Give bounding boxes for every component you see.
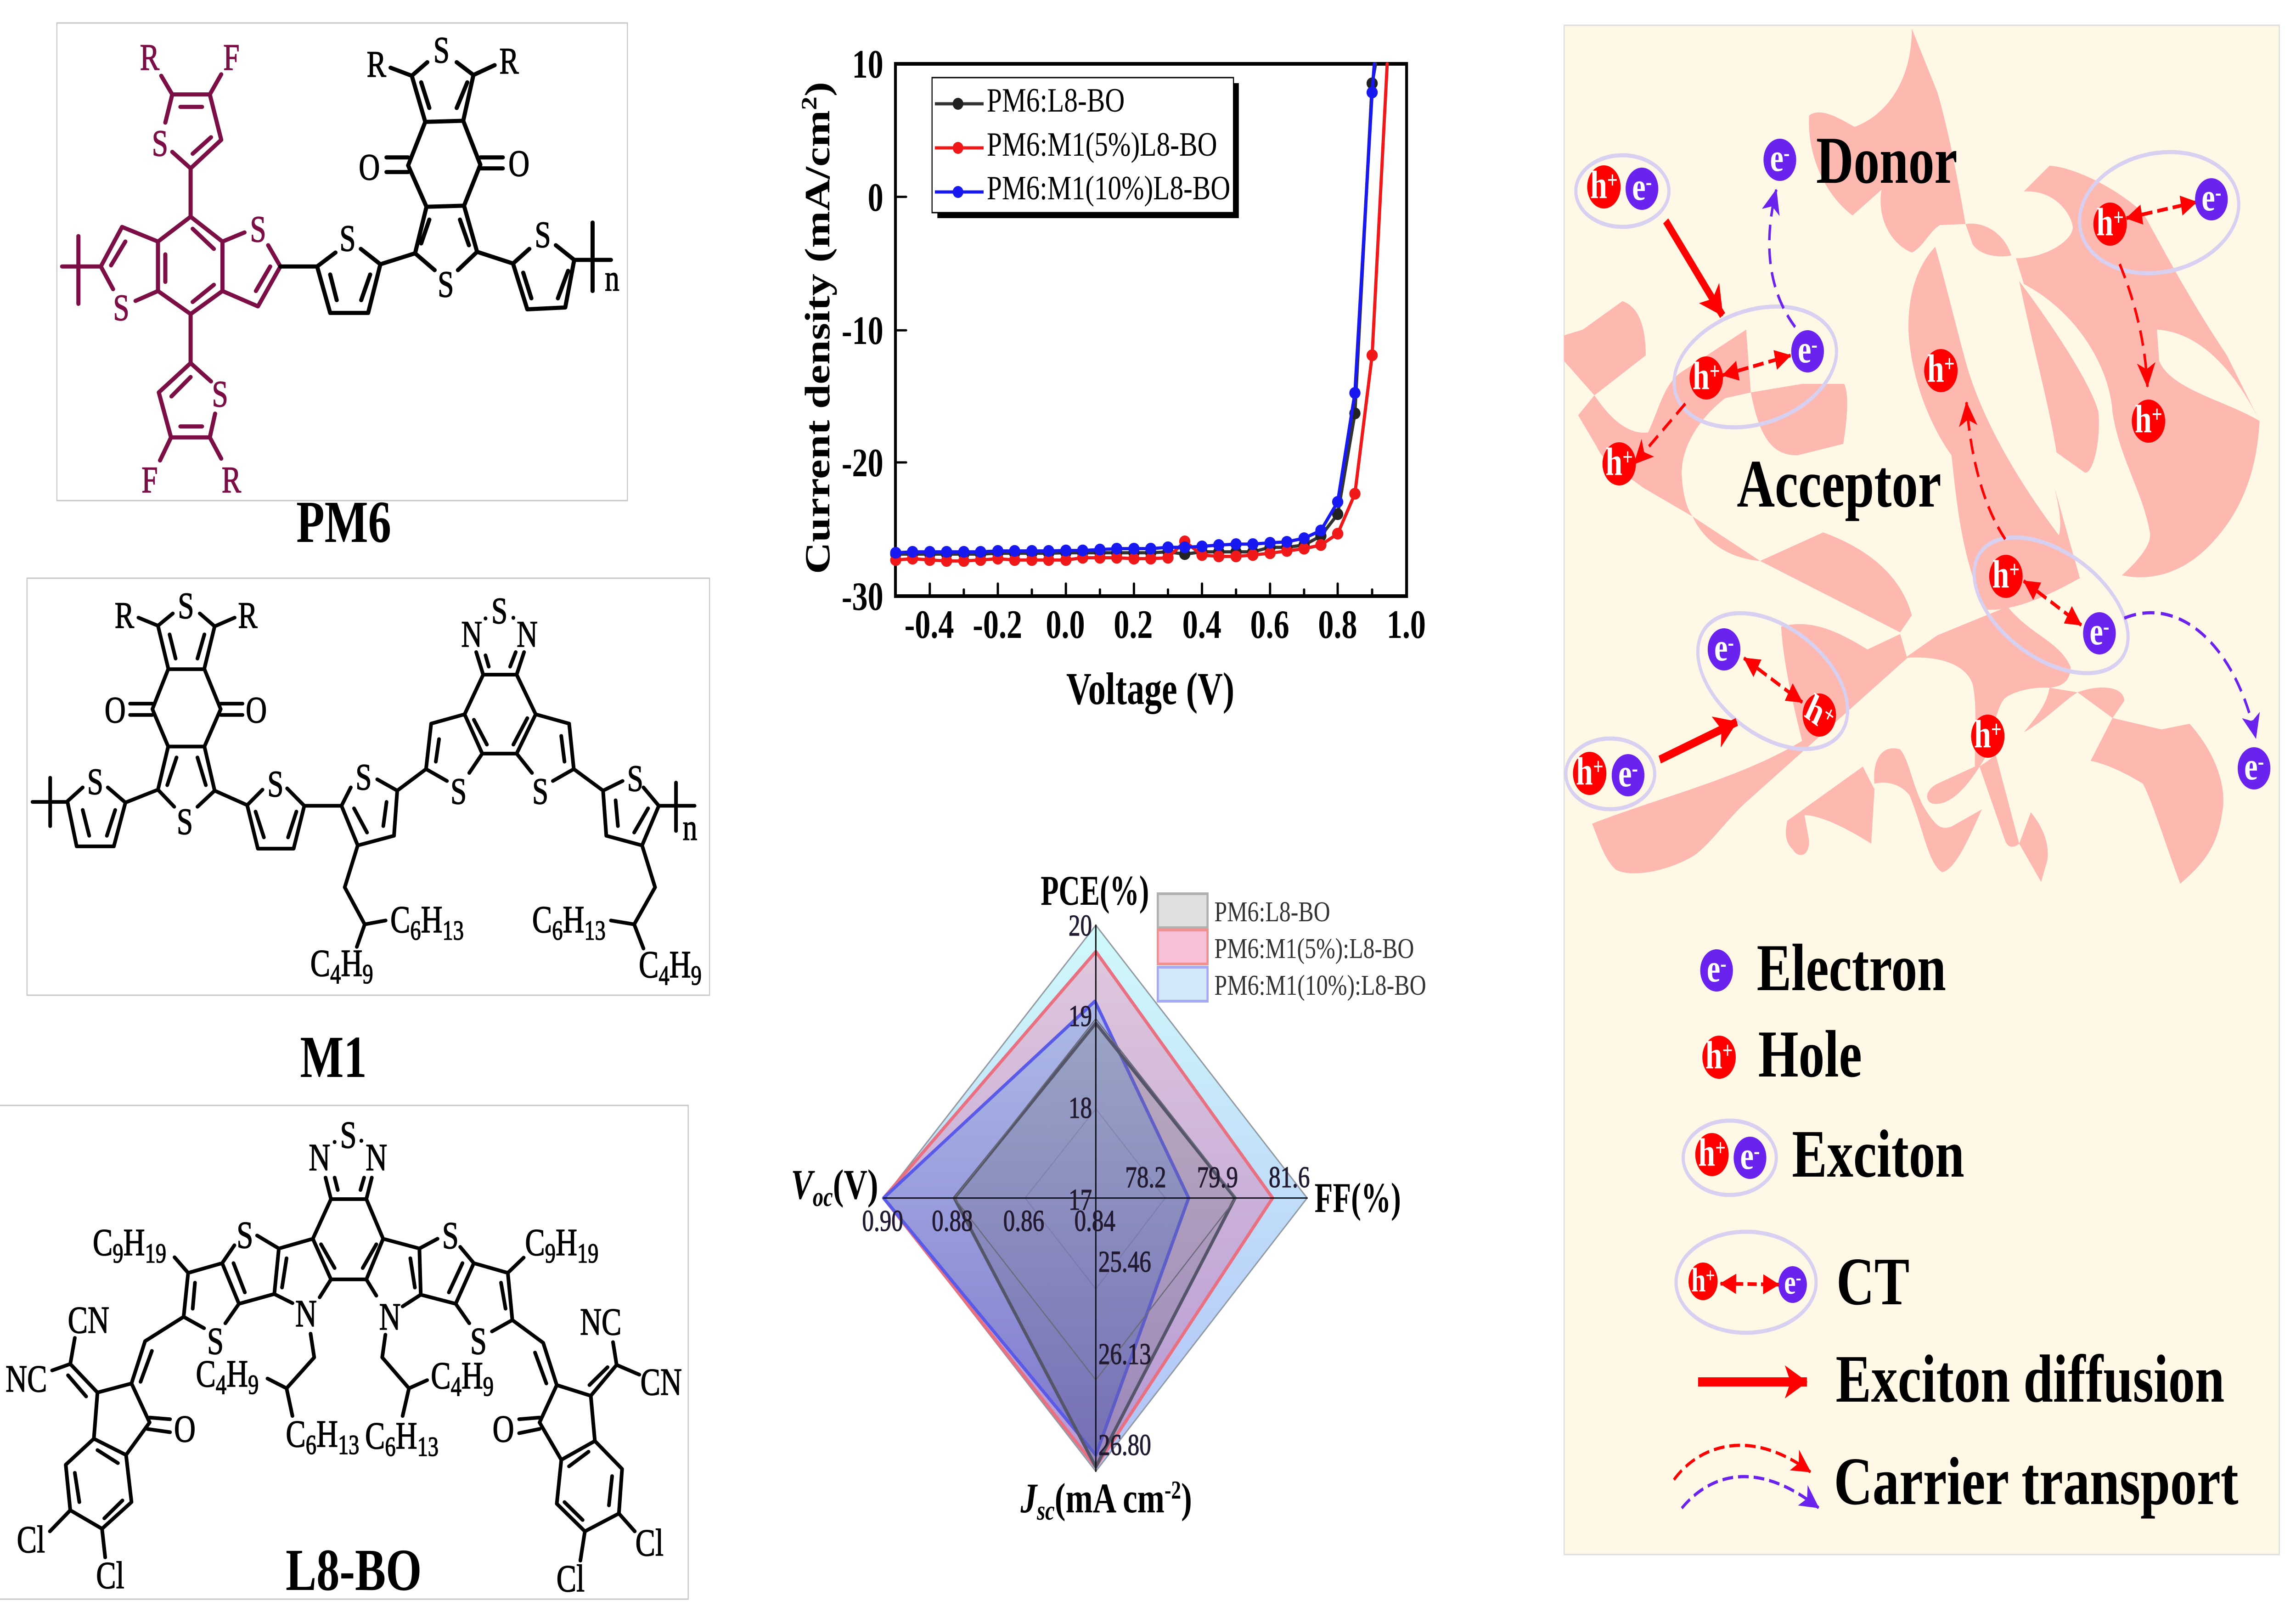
acceptor unit atom labels: S: [433, 29, 450, 71]
frame: L8-BO: [0, 1105, 688, 1599]
acceptor unit atom labels: [339, 29, 619, 305]
L8-BO side chain labels: [93, 1221, 598, 1462]
y axis tick labels: -30: [842, 575, 884, 619]
M1 side chain labels: H: [670, 943, 691, 986]
L8-BO atom labels: Cl: [96, 1554, 124, 1597]
curve: PM6:M1(10%)L8-BO: [896, 64, 1374, 553]
y axis tick labels: 0: [868, 175, 884, 220]
axis title: PCE: PCE(%): [1041, 867, 1149, 914]
radar legend: [1158, 894, 1426, 1001]
radar legend: PM6:M1(5%):L8-BO: [1214, 933, 1414, 964]
acceptor unit atom labels: S: [339, 217, 356, 259]
carriers: holes: h: [1927, 346, 1944, 390]
key: CT state: +: [1706, 1263, 1715, 1287]
L8-BO side chain labels: 9: [248, 1369, 259, 1400]
x axis tick labels: [905, 603, 1426, 647]
donor unit atom labels: S: [113, 287, 129, 328]
carriers: electrons: -: [1811, 332, 1818, 358]
donor unit atom labels: F: [223, 36, 240, 78]
L8-BO side chain labels: H: [396, 1415, 417, 1457]
carriers: electrons: -: [1728, 630, 1734, 656]
L8-BO atom labels: Cl: [557, 1557, 585, 1600]
panel: M1 structure: [27, 578, 709, 1090]
y axis title: ): [798, 82, 837, 96]
carriers: holes: h: [2096, 200, 2113, 244]
axis title: Jsc: (mA cm: [1055, 1475, 1165, 1522]
L8-BO atom labels: N: [295, 1292, 317, 1335]
L8-BO side chain labels: C: [431, 1354, 451, 1397]
arrow: exciton diffusion lower: [1660, 722, 1737, 760]
radar polygons: [884, 925, 1307, 1471]
carriers: electrons: -: [1784, 140, 1790, 166]
y axis tick labels: -20: [842, 441, 884, 485]
key: CT state: [1676, 1232, 1816, 1333]
carriers: electrons: -: [1646, 169, 1652, 195]
radar scale labels: 78.2: [1125, 1160, 1166, 1194]
x axis tick labels: 0.2: [1114, 603, 1153, 647]
M1 side chain labels: 6: [552, 915, 563, 946]
x axis title: Voltage (V): [1066, 664, 1234, 714]
L8-BO side chain labels: 4: [451, 1371, 461, 1402]
carriers: holes: h: [1576, 749, 1593, 793]
L8-BO atom labels: CN: [641, 1361, 682, 1403]
M1 side chain labels: 9: [362, 958, 373, 989]
donor unit atom labels: R: [222, 459, 241, 501]
L8-BO atom labels: Cl: [17, 1518, 45, 1561]
L8-BO atom labels: O: [174, 1408, 196, 1450]
acceptor unit atom labels: R: [367, 43, 386, 85]
carriers: holes: +: [1991, 716, 2002, 743]
radar scale labels: 20: [1069, 908, 1092, 942]
L8-BO atom labels: N: [379, 1296, 401, 1338]
M1 atom labels: S: [178, 585, 194, 626]
radar scale labels: 0.86: [1003, 1204, 1044, 1238]
carriers: electrons: e: [1770, 135, 1784, 180]
acceptor unit atom labels: O: [359, 146, 380, 188]
axis title: Jsc: J: [1020, 1475, 1038, 1522]
donor unit atom labels: S: [152, 122, 168, 164]
M1 atom labels: S: [491, 590, 507, 631]
acceptor unit atom labels: S: [535, 214, 551, 255]
M1 atom labels: n: [683, 806, 697, 848]
acceptor unit atom labels: O: [508, 142, 529, 184]
x axis tick labels: -0.4: [905, 603, 954, 647]
carriers: electrons: e: [1714, 625, 1728, 669]
frame: PM6: [57, 23, 627, 501]
M1 bonds: [33, 614, 695, 948]
donor unit atom labels: [113, 36, 266, 501]
L8-BO side chain labels: C: [286, 1413, 306, 1455]
M1 side chain labels: C: [310, 942, 330, 985]
L8-BO side chain labels: 19: [145, 1238, 166, 1268]
legend: [932, 78, 1239, 218]
y axis title: 2: [797, 96, 822, 110]
L8-BO side chain labels: H: [461, 1354, 483, 1397]
key: exciton: -: [1754, 1138, 1760, 1164]
key: exciton: e: [1740, 1133, 1754, 1178]
radar scale labels: 81.6: [1269, 1160, 1310, 1194]
carriers: holes: h: [2135, 397, 2152, 441]
panel background: [1564, 25, 2279, 1555]
carriers: holes: h: [1992, 552, 2009, 596]
carriers: electrons: -: [1632, 755, 1638, 782]
x axis tick labels: -0.2: [973, 603, 1022, 647]
radar scale labels: 26.80: [1098, 1428, 1151, 1462]
key: electron: e: [1707, 946, 1720, 990]
donor unit atom labels: S: [212, 373, 228, 415]
L8-BO side chain labels: 9: [545, 1238, 556, 1268]
radar scale labels: 17: [1069, 1183, 1092, 1217]
L8-BO side chain labels: 19: [577, 1238, 598, 1268]
axis title: Voc: oc: [813, 1181, 833, 1212]
carriers: holes: +: [2009, 557, 2020, 583]
M1 atom labels: O: [105, 689, 126, 731]
L8-BO atom labels: S: [236, 1214, 253, 1257]
radar scale labels: 25.46: [1098, 1245, 1151, 1279]
y axis tick labels: [842, 42, 884, 619]
radar scale labels: 79.9: [1197, 1160, 1238, 1194]
donor/acceptor domains: [1564, 28, 2260, 884]
acceptor unit atom labels: S: [438, 263, 454, 305]
carriers: holes: +: [1593, 754, 1604, 780]
panel: PM6 structure: [57, 23, 627, 555]
heading: PM6: PM6: [296, 489, 391, 555]
L8-BO atom labels: S: [470, 1320, 487, 1363]
L8-BO side chain labels: 13: [338, 1429, 359, 1460]
M1 side chain labels: 4: [658, 960, 670, 991]
panel: morphology and charge process schematic: [1564, 25, 2279, 1555]
key label: Carrier transport: Carrier transport: [1834, 1443, 2239, 1519]
radar legend: PM6:L8-BO: [1214, 896, 1330, 927]
carriers: holes: +: [1819, 700, 1839, 730]
x axis tick labels: 1.0: [1387, 603, 1426, 647]
legend: PM6:M1(10%)L8-BO: [987, 169, 1230, 207]
carriers: holes: +: [1944, 351, 1955, 377]
key: hole carrier arrow: [1674, 1445, 1811, 1480]
L8-BO side chain labels: C: [196, 1353, 216, 1395]
L8-BO atom labels: NC: [6, 1358, 47, 1400]
L8-BO atom labels: S: [340, 1114, 357, 1156]
L8-BO atom labels: CN: [68, 1299, 109, 1341]
M1 atom labels: S: [267, 763, 284, 805]
M1 side chain labels: 9: [691, 960, 702, 991]
charge-transfer double arrows: [1722, 202, 2196, 702]
donor unit atom labels: S: [250, 208, 266, 250]
acceptor unit atom labels: n: [605, 257, 619, 299]
y axis tick labels: 10: [852, 42, 884, 87]
chart: J-V curves: [797, 42, 1426, 714]
carriers: electrons: -: [2258, 749, 2264, 775]
electron transport dashed arrows: [1769, 190, 2256, 738]
carriers: electrons: e: [2201, 175, 2215, 219]
acceptor unit bonds: [281, 62, 611, 313]
x axis tick labels: 0.4: [1182, 603, 1221, 647]
key: exciton: [1683, 1121, 1776, 1195]
L8-BO side chain labels: 4: [216, 1369, 226, 1400]
key: exciton: +: [1715, 1135, 1726, 1161]
L8-BO atom labels: NC: [580, 1301, 621, 1343]
L8-BO atom labels: N: [366, 1136, 387, 1179]
radar scale labels: [862, 908, 1310, 1462]
label: Donor: Donor: [1816, 124, 1958, 197]
M1 atom labels: S: [532, 770, 548, 812]
carriers: electrons: -: [2215, 180, 2221, 206]
radar scale labels: 0.90: [862, 1204, 903, 1238]
axis title: FF: FF(%): [1315, 1174, 1401, 1221]
key: CT state: -: [1796, 1266, 1801, 1289]
key: hole: [1702, 1033, 1736, 1079]
key label: Exciton diffusion: Exciton diffusion: [1836, 1341, 2224, 1416]
M1 side chain labels: 4: [330, 958, 341, 989]
carriers: electrons: e: [1632, 164, 1646, 209]
x axis tick labels: 0.6: [1250, 603, 1289, 647]
legend: PM6:M1(5%)L8-BO: [987, 126, 1217, 163]
carriers: holes: h: [1974, 712, 1991, 756]
carriers: holes: h: [1605, 440, 1622, 484]
L8-BO side chain labels: C: [365, 1415, 385, 1457]
y axis tick labels: -10: [842, 309, 884, 353]
carriers: holes: +: [2152, 401, 2162, 428]
carriers: holes: +: [1607, 167, 1618, 193]
key: electron: [1700, 946, 1733, 992]
radar scale labels: 19: [1069, 999, 1092, 1033]
L8-BO side chain labels: H: [316, 1413, 338, 1455]
M1 side chain labels: C: [532, 898, 552, 941]
key: CT state: h: [1691, 1262, 1706, 1299]
M1 atom labels: S: [177, 800, 193, 842]
x axis tick labels: 0.8: [1318, 603, 1357, 647]
exciton and CT state rings: [1566, 141, 2244, 809]
curve: PM6:L8-BO: [896, 64, 1376, 554]
carriers: holes: [1573, 163, 2165, 795]
key: electron: -: [1720, 951, 1727, 977]
M1 atom labels: O: [246, 689, 267, 731]
L8-BO atom labels: Cl: [636, 1522, 664, 1564]
y axis title: Current density (mA/cm: [798, 93, 837, 574]
key: hole: h: [1705, 1033, 1722, 1077]
carriers: electrons: [1612, 135, 2270, 796]
M1 side chain labels: [310, 898, 702, 991]
L8-BO atom labels: S: [442, 1214, 459, 1257]
carriers: holes: +: [2113, 204, 2124, 231]
M1 side chain labels: C: [639, 943, 658, 986]
donor unit bonds: [62, 74, 281, 461]
M1 atom labels: S: [355, 756, 372, 798]
L8-BO side chain labels: H: [226, 1353, 248, 1395]
heading: L8-BO: L8-BO: [286, 1537, 422, 1603]
L8-BO atom labels: O: [493, 1408, 514, 1450]
panel: L8-BO structure: [0, 1105, 688, 1603]
M1 side chain labels: H: [563, 898, 584, 941]
plot frame: [895, 64, 1407, 596]
key label: Electron: Electron: [1757, 931, 1946, 1005]
donor unit atom labels: F: [141, 459, 158, 501]
M1 atom labels: N: [461, 613, 482, 655]
x axis tick labels: 0.0: [1046, 603, 1085, 647]
carriers: holes: h: [1800, 685, 1832, 734]
hole transport dashed arrows: [1634, 264, 2147, 539]
L8-BO atom labels: [6, 1114, 682, 1600]
radar scale labels: 18: [1069, 1091, 1092, 1125]
heading: M1: M1: [300, 1024, 367, 1090]
carriers: electrons: e: [1798, 327, 1811, 371]
acceptor unit atom labels: R: [499, 40, 519, 82]
carriers: holes: h: [1590, 163, 1607, 207]
M1 side chain labels: 13: [443, 915, 464, 946]
carriers: electrons: -: [2103, 614, 2109, 640]
carriers: holes: +: [1710, 358, 1720, 384]
key label: Hole: Hole: [1758, 1017, 1862, 1091]
L8-BO side chain labels: H: [124, 1221, 145, 1264]
key: exciton: h: [1698, 1130, 1715, 1174]
arrow: exciton diffusion upper: [1666, 221, 1722, 316]
axis title: Jsc: -2: [1165, 1476, 1181, 1504]
key: CT state: e: [1784, 1264, 1796, 1302]
carriers: holes: h: [1693, 354, 1710, 398]
key: electron carrier arrow: [1682, 1477, 1818, 1508]
radar scale labels: 26.13: [1098, 1337, 1151, 1371]
carriers: electrons: e: [2089, 609, 2103, 653]
key label: Exciton: Exciton: [1792, 1116, 1964, 1191]
axis ticks: [895, 197, 1372, 596]
L8-BO side chain labels: 9: [483, 1371, 494, 1402]
radar scale labels: 0.84: [1075, 1204, 1115, 1238]
L8-BO atom labels: S: [207, 1320, 224, 1363]
key label: CT: CT: [1836, 1244, 1909, 1319]
carriers: electrons: e: [2244, 744, 2258, 788]
key: exciton diffusion arrow: [1698, 1377, 1807, 1387]
legend: PM6:L8-BO: [987, 82, 1125, 119]
key: hole: +: [1722, 1037, 1733, 1064]
M1 atom labels: S: [450, 770, 467, 812]
carriers: holes: +: [1622, 444, 1633, 470]
label: Acceptor: Acceptor: [1737, 446, 1941, 521]
M1 atom labels: N: [517, 613, 538, 655]
L8-BO atom labels: N: [309, 1136, 330, 1179]
donor unit atom labels: R: [140, 36, 159, 78]
axis title: Jsc: ): [1181, 1475, 1192, 1522]
L8-BO side chain labels: 6: [385, 1431, 396, 1462]
axis title: Voc: V: [791, 1161, 815, 1208]
frame: M1: [27, 578, 709, 995]
L8-BO side chain labels: H: [556, 1221, 577, 1264]
axis title: Voc: (V): [833, 1161, 878, 1208]
M1 atom labels: R: [115, 594, 134, 636]
M1 atom labels: S: [87, 761, 103, 802]
legend: symbols and process key: [1674, 931, 2239, 1519]
M1 side chain labels: 13: [584, 915, 606, 946]
axis title: Jsc: sc: [1036, 1495, 1055, 1526]
carriers: electrons: e: [1618, 751, 1632, 795]
L8-BO side chain labels: C: [93, 1221, 113, 1264]
M1 side chain labels: H: [341, 942, 362, 985]
chart: radar: [791, 867, 1426, 1526]
radar scale labels: 0.88: [932, 1204, 973, 1238]
L8-BO side chain labels: 6: [306, 1429, 316, 1460]
L8-BO side chain labels: 13: [417, 1431, 439, 1462]
L8-BO side chain labels: C: [525, 1221, 545, 1264]
L8-BO side chain labels: 9: [113, 1238, 124, 1268]
M1 side chain labels: 6: [410, 915, 421, 946]
M1 atom labels: R: [238, 594, 258, 636]
M1 atom labels: S: [627, 757, 643, 799]
L8-BO bonds: [50, 1141, 639, 1561]
curve: PM6:M1(5%)L8-BO: [896, 64, 1387, 561]
M1 atom labels: [87, 585, 697, 848]
radar legend: PM6:M1(10%):L8-BO: [1214, 969, 1426, 1001]
M1 side chain labels: H: [421, 898, 443, 941]
M1 side chain labels: C: [390, 898, 410, 941]
